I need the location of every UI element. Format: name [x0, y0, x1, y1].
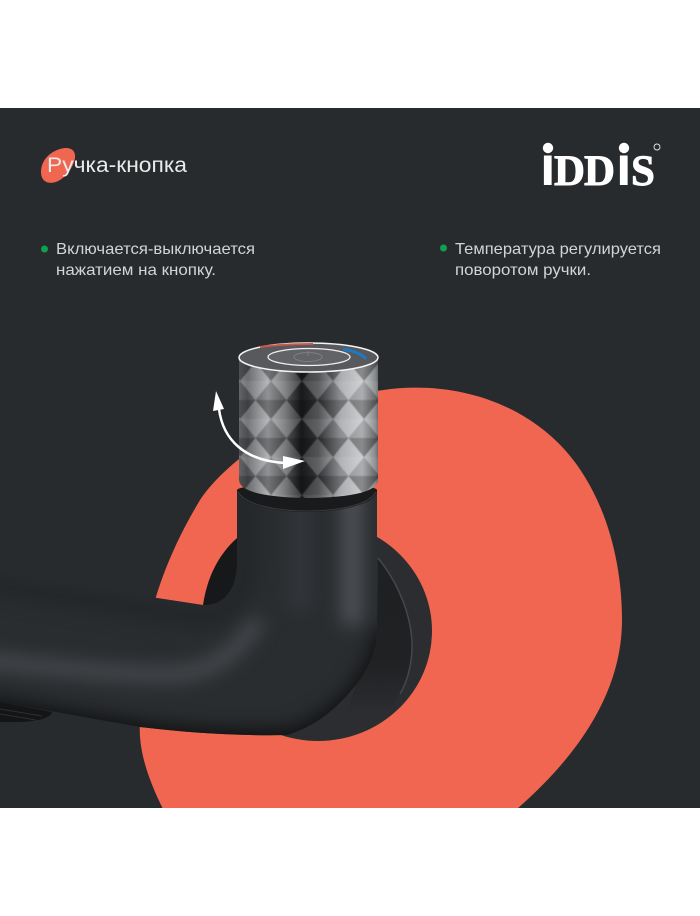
left feature bullet: Включается-выключается — [56, 241, 255, 258]
logo: iDDiS: D — [584, 148, 615, 195]
dark panel — [0, 108, 700, 808]
logo: iDDiS: S — [631, 148, 655, 195]
right feature bullet — [440, 241, 661, 279]
body shading — [0, 501, 377, 736]
spout and riser body — [0, 490, 377, 736]
collar rim — [237, 487, 377, 512]
logo: iDDiS: i — [616, 134, 632, 197]
title: Ручка-кнопка — [47, 153, 187, 177]
coral blob background shape — [140, 388, 622, 815]
infographic page — [0, 108, 700, 808]
rotation arrow — [213, 391, 305, 469]
logo: iDDiS: D — [554, 148, 585, 195]
handle top cap — [239, 343, 378, 372]
left feature bullet — [41, 241, 255, 279]
wall plate — [203, 521, 432, 741]
left feature bullet: нажатием на кнопку. — [56, 262, 216, 279]
faucet — [0, 343, 432, 750]
logo: iDDiS — [540, 134, 660, 197]
coral title blob — [41, 148, 75, 183]
logo: iDDiS: i — [540, 134, 556, 197]
threaded fitting — [0, 702, 52, 722]
knurled diamond handle — [239, 360, 378, 498]
right feature bullet: поворотом ручки. — [455, 262, 591, 279]
right feature bullet: Температура регулируется — [455, 241, 661, 258]
